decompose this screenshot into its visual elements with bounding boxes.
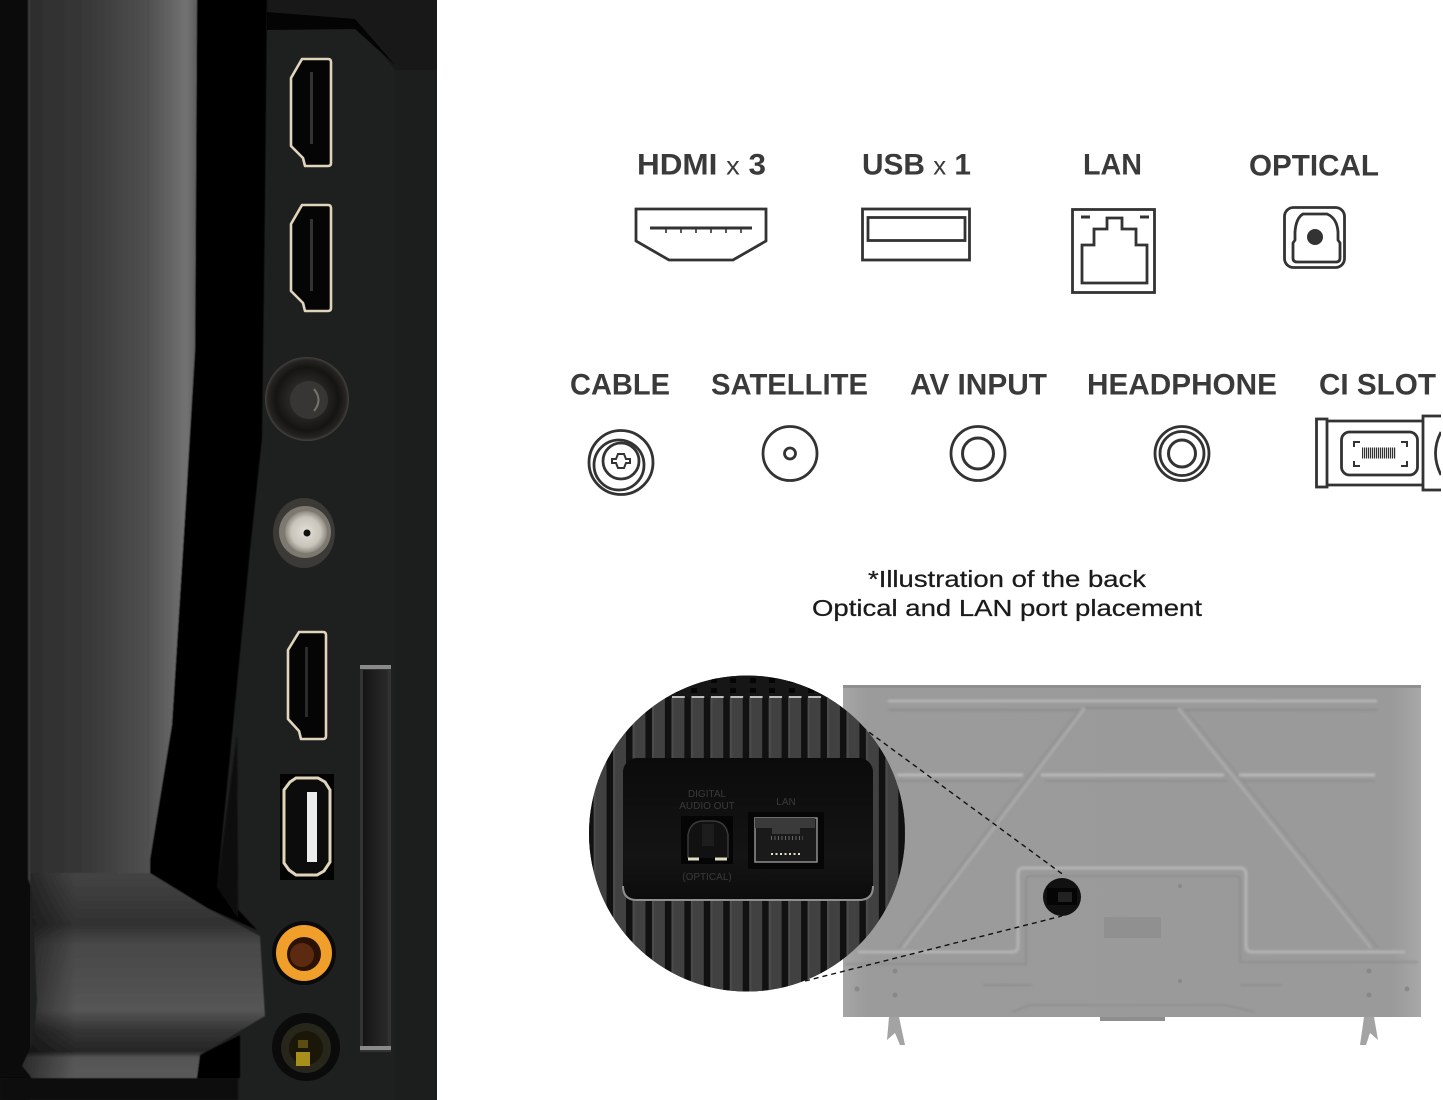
- label: LAN: [1083, 148, 1142, 182]
- printed port labels: AUDIO OUT: [679, 801, 735, 812]
- printed port labels: LAN: [776, 797, 796, 808]
- rear optical port: [681, 816, 733, 864]
- TV back illustration: [805, 685, 1421, 1045]
- heading row: optical port: [1249, 150, 1379, 268]
- heading row: LAN port: [1072, 148, 1154, 292]
- port: USB: [280, 774, 334, 880]
- printed port labels: [679, 789, 796, 883]
- label: USB x 1: [862, 148, 971, 182]
- TV back ribs: [845, 701, 1418, 1012]
- port: HDMI pin bars: [305, 72, 313, 717]
- connector: AV input: [910, 368, 1047, 480]
- port: satellite F connector: [273, 498, 335, 568]
- printed port labels: (OPTICAL): [682, 872, 732, 883]
- caption: *Illustration of the back: [868, 566, 1146, 592]
- connector: headphone: [1087, 368, 1277, 480]
- icon: HDMI: [636, 209, 766, 260]
- port recess: [623, 758, 873, 900]
- label: SATELLITE: [711, 368, 868, 402]
- port: headphone jack: [272, 1013, 340, 1081]
- stand shapes: [0, 0, 267, 1100]
- port: AV orange: [272, 921, 336, 985]
- icon: CI card: [1316, 416, 1443, 490]
- connector: CI slot: [1316, 368, 1443, 490]
- port: HDMI 3: [288, 632, 326, 739]
- connector: cable: [570, 368, 670, 494]
- label: CI SLOT: [1319, 368, 1436, 402]
- rear LAN port: [748, 812, 824, 869]
- port: HDMI 1: [291, 59, 331, 166]
- bezel edge: [0, 0, 30, 1100]
- zoom circle: rear port detail: [585, 670, 910, 997]
- icon: optical: [1284, 208, 1344, 268]
- icon: headphone: [1155, 426, 1209, 480]
- connector: satellite: [711, 368, 868, 480]
- caption: [812, 566, 1203, 621]
- port location marker: [1043, 878, 1081, 916]
- caption: Optical and LAN port placement: [812, 595, 1203, 621]
- printed port labels: DIGITAL: [688, 789, 727, 800]
- label: AV INPUT: [910, 368, 1047, 402]
- port: cable antenna socket: [265, 357, 349, 441]
- TV back screws: [854, 884, 1410, 998]
- icon: satellite: [763, 426, 817, 480]
- port: CI card slot: [360, 665, 391, 1052]
- heading row: HDMI port: [636, 148, 766, 260]
- label: HEADPHONE: [1087, 368, 1277, 402]
- icon: AV input: [951, 426, 1005, 480]
- label: OPTICAL: [1249, 150, 1379, 182]
- port: HDMI 2: [291, 205, 331, 311]
- TV legs: [887, 1017, 1378, 1045]
- grille holes: [672, 678, 814, 693]
- label: HDMI x 3: [637, 148, 766, 182]
- icon: cable: [589, 430, 653, 494]
- heading row: USB port: [862, 148, 971, 260]
- icon: USB: [862, 209, 970, 260]
- label: CABLE: [570, 368, 670, 402]
- panel: TV side photo: [0, 0, 437, 1100]
- top wedge: [267, 12, 395, 65]
- icon: LAN: [1072, 210, 1154, 292]
- dashed callout lines: [805, 727, 1065, 981]
